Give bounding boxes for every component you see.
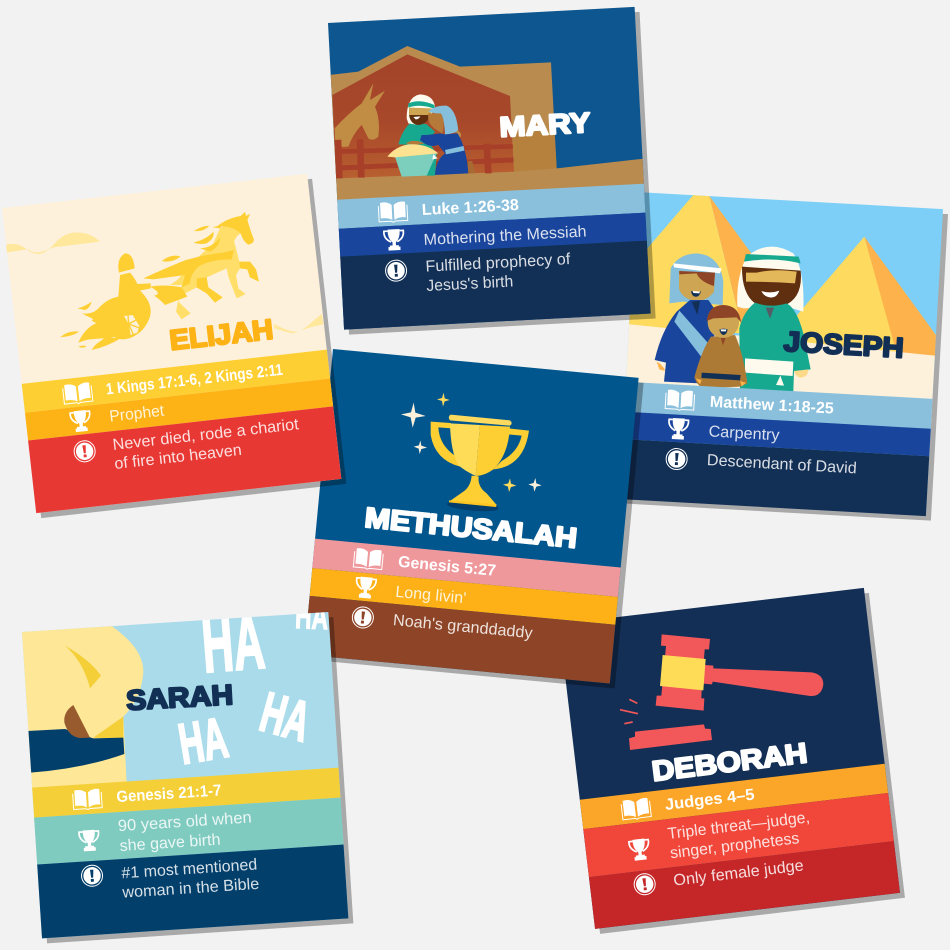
- illustration: nativity stable: [327, 46, 648, 203]
- heading: Elijah: ELIJAH: [168, 314, 275, 356]
- laughter words HA: HA: [174, 706, 232, 777]
- holy couple and manger: [387, 94, 475, 177]
- card: Elijah: [2, 174, 346, 518]
- info bands: Mary: Fulfilled prophecy of: [425, 251, 571, 276]
- info bands: Mary: Luke 1:26-38: [421, 197, 519, 219]
- illustration: Sarah laughing: [20, 595, 329, 792]
- fence: [335, 139, 514, 178]
- info bands: Sarah: woman in the Bible: [121, 876, 260, 902]
- laughter words HA: HA: [254, 680, 317, 753]
- info bands: Elijah: of fire into heaven: [114, 442, 243, 473]
- info bands: Mary: Mothering the Messiah: [423, 223, 587, 249]
- info bands: Joseph: [619, 382, 932, 516]
- info bands: Mary: Jesus's birth: [426, 273, 514, 295]
- info bands: Deborah: Triple threat—judge,: [667, 809, 811, 843]
- card: Joseph: [626, 192, 948, 521]
- horse: [176, 212, 259, 319]
- info bands: Elijah: Never died, rode a chariot: [112, 416, 300, 454]
- child: [694, 335, 747, 388]
- flames: [143, 220, 234, 305]
- info bands: Mary: [337, 184, 651, 330]
- heading: Deborah: DEBORAH: [650, 737, 809, 787]
- info bands: Joseph: Descendant of David: [706, 452, 857, 477]
- card: Mary: [327, 7, 656, 335]
- info bands: Elijah: 1 Kings 17:1-6, 2 Kings 2:11: [105, 362, 284, 398]
- info bands: Methusalah: Genesis 5:27: [397, 554, 497, 580]
- info bands: Deborah: singer, prophetess: [669, 830, 800, 862]
- card: Sarah: [20, 595, 353, 943]
- info bands: Methusalah: Long livin': [395, 584, 467, 607]
- donkey: [335, 83, 385, 147]
- info bands: Methusalah: [304, 539, 621, 684]
- info bands: Sarah: Genesis 21:1-7: [116, 782, 222, 806]
- heading: Mary: MARY: [499, 107, 592, 143]
- card: Deborah: [559, 588, 905, 934]
- info bands: Sarah: 90 years old when: [117, 809, 252, 835]
- heading: Joseph: JOSEPH: [783, 326, 905, 364]
- info bands: Sarah: she gave birth: [119, 832, 221, 855]
- rider and chariot: [118, 253, 135, 273]
- info bands: Elijah: Prophet: [109, 403, 166, 426]
- father: [737, 247, 804, 312]
- laughter words HA: HA: [199, 597, 267, 689]
- laughter words HA: [178, 612, 328, 765]
- illustration: chariot of fire: [6, 212, 323, 350]
- mother: [657, 362, 665, 371]
- info bands: Deborah: [580, 764, 900, 929]
- info bands: Methusalah: Noah's granddaddy: [392, 612, 533, 642]
- info bands: Deborah: Judges 4–5: [664, 786, 756, 814]
- laughter words HA: HA: [295, 595, 329, 637]
- info bands: Joseph: Carpentry: [708, 423, 780, 444]
- illustration: gavel: [620, 634, 823, 750]
- info bands: Sarah: [32, 768, 348, 938]
- info bands: Sarah: #1 most mentioned: [121, 856, 258, 882]
- info bands: Elijah: [22, 350, 341, 513]
- heading: Sarah: SARAH: [125, 679, 234, 716]
- card: Methusalah: [304, 349, 644, 689]
- illustration: golden trophy with sparkles: [401, 393, 542, 513]
- info bands: Deborah: Only female judge: [673, 857, 805, 890]
- info bands: Joseph: Matthew 1:18-25: [709, 394, 834, 418]
- heading: Methusalah: METHUSALAH: [363, 502, 578, 554]
- illustration: Joseph family and pyramids: [626, 195, 936, 423]
